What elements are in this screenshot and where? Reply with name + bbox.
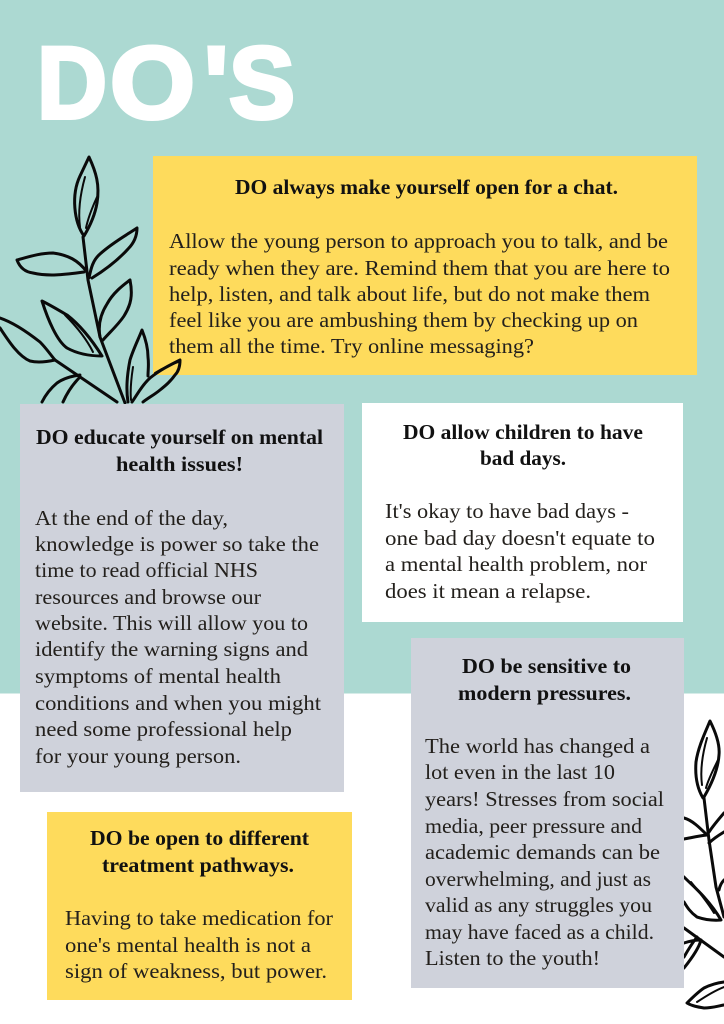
text: educate yourself body: time to read official NHS: [35, 558, 258, 582]
heading: treatment pathways: treatment pathways.: [102, 853, 294, 877]
text: modern pressures body: lot even in the last 10: [425, 760, 615, 784]
heading: modern pressures: modern pressures.: [458, 681, 631, 705]
text: open for a chat body: feel like you are ambushing them by checking up on: [169, 308, 639, 332]
text: modern pressures body: years! Stresses from social: [425, 787, 664, 811]
heading: treatment pathways: [90, 826, 309, 877]
text: modern pressures body: overwhelming, and just as: [425, 867, 651, 891]
panel: educate yourself: [20, 404, 344, 792]
heading: modern pressures: DO be sensitive to: [462, 654, 631, 678]
text: open for a chat body: them all the time. Try online messaging?: [169, 334, 534, 358]
text: educate yourself body: conditions and when you might: [35, 691, 321, 715]
title: [37, 26, 295, 140]
heading: educate yourself: DO educate yourself on mental: [36, 425, 323, 449]
panel: treatment pathways: [47, 812, 352, 1000]
panel: modern pressures: [411, 638, 684, 988]
text: treatment pathways body: [65, 906, 333, 983]
heading: allow bad days: bad days.: [480, 446, 566, 470]
text: educate yourself body: need some professional help: [35, 717, 292, 741]
text: modern pressures body: Listen to the youth!: [425, 946, 600, 970]
heading: educate yourself: health issues!: [116, 452, 243, 476]
heading: educate yourself: [36, 425, 323, 476]
text: educate yourself body: identify the warning signs and: [35, 637, 309, 661]
text: modern pressures body: may have faced as a child.: [425, 920, 654, 944]
text: treatment pathways body: Having to take medication for: [65, 906, 333, 930]
heading: open for a chat: DO always make yourself open for a chat.: [235, 175, 618, 199]
text: modern pressures body: The world has changed a: [425, 734, 651, 758]
text: educate yourself body: resources and browse our: [35, 585, 261, 609]
title: D: [37, 26, 107, 140]
text: treatment pathways body: one's mental health is not a: [65, 933, 312, 957]
text: open for a chat body: ready when they are. Remind them that you are here to: [169, 256, 670, 280]
text: educate yourself body: for your young person.: [35, 744, 241, 768]
icon: leafy branch top left: [0, 157, 180, 403]
title: ': [204, 26, 228, 140]
panel: always open for a chat: [153, 156, 697, 375]
text: allow bad days body: does it mean a relapse.: [385, 579, 591, 603]
text: allow bad days body: a mental health problem, nor: [385, 552, 647, 576]
teal background band: [0, 0, 724, 694]
text: modern pressures body: academic demands can be: [425, 840, 660, 864]
text: open for a chat body: Allow the young person to approach you to talk, and be: [169, 229, 668, 253]
text: educate yourself body: knowledge is power so take the: [35, 532, 319, 556]
text: educate yourself body: symptoms of mental health: [35, 664, 282, 688]
heading: treatment pathways: DO be open to different: [90, 826, 309, 850]
text: open for a chat body: help, listen, and talk about life, but do not make them: [169, 282, 650, 306]
title: S: [229, 26, 295, 140]
text: educate yourself body: At the end of the day,: [35, 506, 228, 530]
text: allow bad days body: one bad day doesn't equate to: [385, 526, 655, 550]
text: allow bad days body: [385, 499, 655, 603]
text: modern pressures body: [425, 734, 664, 970]
text: modern pressures body: valid as any struggles you: [425, 893, 653, 917]
text: educate yourself body: [35, 506, 321, 768]
heading: allow bad days: DO allow children to have: [403, 420, 643, 444]
panel: allow bad days: [362, 403, 683, 622]
text: open for a chat body: [169, 229, 670, 358]
text: modern pressures body: media, peer pressure and: [425, 814, 643, 838]
heading: modern pressures: [458, 654, 631, 705]
icon: leafy branch bottom right: [684, 721, 724, 1008]
text: allow bad days body: It's okay to have bad days -: [385, 499, 629, 523]
heading: allow bad days: [403, 420, 643, 470]
text: treatment pathways body: sign of weakness, but power.: [65, 959, 327, 983]
text: educate yourself body: website. This will allow you to: [35, 611, 308, 635]
title: O: [110, 26, 195, 140]
